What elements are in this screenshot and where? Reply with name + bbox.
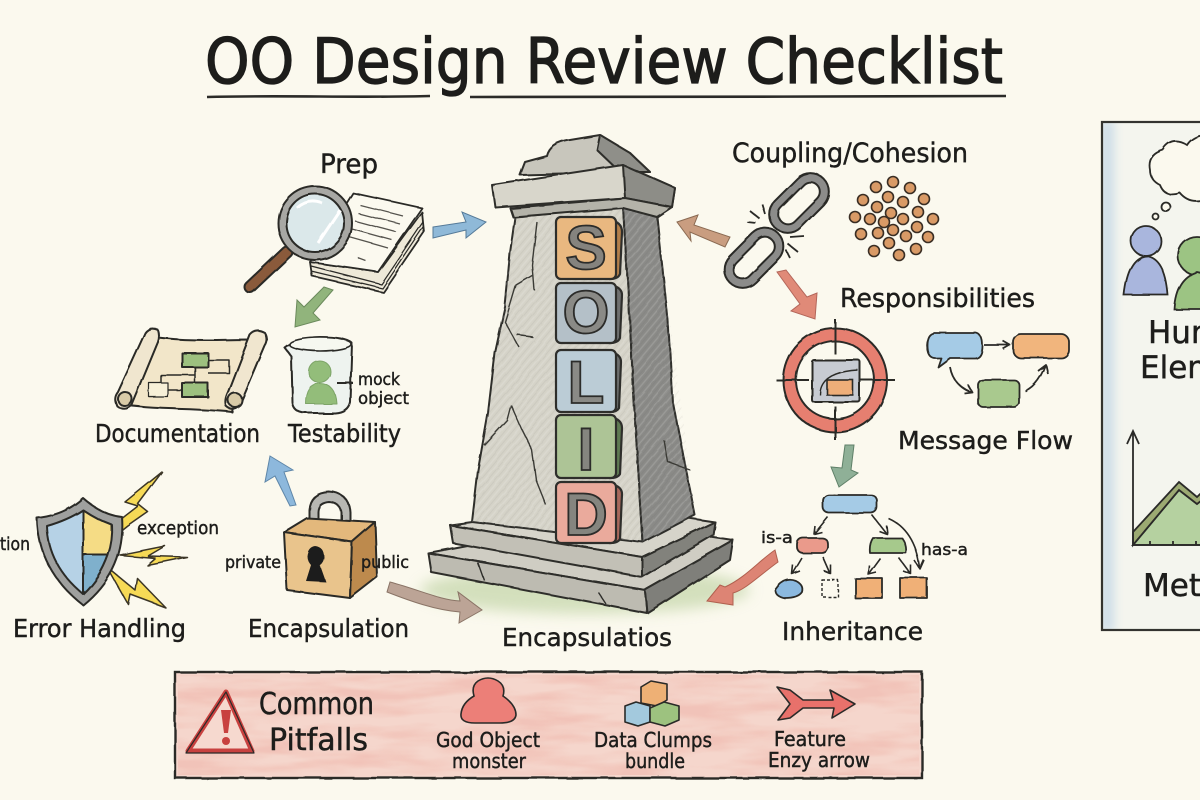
block L: L (568, 349, 604, 416)
error handling section (0, 472, 219, 643)
block I (556, 415, 622, 483)
label: Error Handling: Error Handling (13, 614, 186, 643)
label: public: public (361, 553, 409, 573)
label: Feature Enzy arrow: Enzy arrow (768, 748, 870, 772)
label: Encapsulatios under pillar: Encapsulatios (502, 623, 672, 652)
arrow: responsibilities to inheritance (831, 445, 858, 487)
chart: metrics (1127, 431, 1200, 545)
label: exception: exception (137, 518, 219, 539)
message flow section (898, 333, 1073, 455)
label: is-a: is-a (761, 528, 793, 547)
icon: cohesion dots (850, 176, 938, 260)
prep section (250, 149, 424, 292)
block S (556, 214, 622, 283)
label: Human Elements (clipped) (1140, 315, 1200, 386)
block L (556, 349, 621, 416)
icon: beaker with mock object (284, 337, 353, 413)
title: OO Design Review Checklist (205, 25, 1003, 98)
encapsulation section (225, 492, 409, 643)
label: Prep: Prep (320, 149, 378, 180)
block O: O (563, 279, 609, 346)
label: Coupling/Cohesion: Coupling/Cohesion (732, 138, 968, 169)
icon: broken chain (723, 172, 830, 289)
pitfall: Data Clumps bundle (594, 681, 712, 773)
SOLID blocks (556, 214, 622, 548)
stone pillar (428, 135, 733, 613)
arrow: coupling to responsibilities (777, 270, 817, 319)
label: Documentation: Documentation (95, 419, 260, 448)
arrow: encapsulation to foundation (387, 582, 482, 623)
label: God Object monster (436, 728, 540, 773)
label: God Object monster: God Object (436, 728, 540, 752)
icon: magnifying glass (250, 190, 348, 287)
icon: papers (310, 193, 424, 292)
monolith: SOLID pillar (420, 135, 750, 614)
label: mock object (358, 370, 409, 409)
label: Data Clumps bundle: Data Clumps (594, 728, 712, 752)
pillar faces (472, 207, 695, 542)
icon: thought cloud (1150, 134, 1200, 220)
arrow: encapsulation to testability (265, 456, 296, 506)
block D (556, 481, 622, 548)
grass (420, 566, 750, 614)
cracks (484, 222, 690, 505)
label: Encapsulation: Encapsulation (248, 614, 409, 643)
arrow: prep to pillar (433, 212, 486, 238)
heading: Common Pitfalls: Common (259, 687, 374, 722)
label: Feature Enzy arrow: Feature (774, 727, 846, 751)
icon: people (1124, 226, 1200, 309)
icon: lightning bolts (107, 472, 187, 607)
icon: padlock (284, 492, 377, 598)
icon: warning triangle (186, 692, 254, 753)
icon: cube bundle (625, 681, 679, 726)
icon: target with class window (776, 319, 895, 440)
icon: message flow diagram (927, 333, 1069, 407)
icon: class hierarchy (775, 495, 927, 598)
panel: common pitfalls (175, 672, 922, 778)
label: Testability: Testability (287, 419, 401, 448)
coupling/cohesion section (723, 138, 968, 289)
inheritance section (761, 495, 968, 646)
block D: D (564, 481, 608, 548)
label: Metrics (clipped): Met (1143, 568, 1200, 604)
label: mock object: mock (358, 370, 400, 390)
clipped label: exception at page edge: tion (0, 534, 30, 555)
arrow: prep to testability (295, 287, 333, 327)
documentation section (95, 329, 267, 448)
icon: monster blob (461, 678, 516, 723)
label: Responsibilities: Responsibilities (840, 284, 1035, 314)
base lower tier (428, 520, 733, 613)
testability section (284, 337, 409, 448)
arrow: inheritance to foundation (707, 550, 778, 605)
pitfall: Feature Envy arrow (768, 687, 870, 772)
cap rock (520, 135, 650, 175)
heading: Common Pitfalls: Pitfalls (269, 723, 368, 758)
label: Feature Enzy arrow (768, 727, 870, 772)
heading: Common Pitfalls (259, 687, 374, 758)
label: private: private (225, 553, 281, 573)
block S: S (565, 214, 607, 283)
panel: human elements and metrics (1100, 120, 1200, 632)
label: mock object: object (358, 389, 409, 409)
arrow: coupling to pillar (677, 215, 730, 247)
label: has-a: has-a (921, 540, 968, 559)
label: God Object monster: monster (452, 749, 527, 773)
pitfall: God Object monster (436, 678, 540, 773)
icon: scroll with diagram (115, 329, 267, 412)
icon: shield (37, 498, 122, 605)
icon: feature arrow (777, 687, 855, 720)
block I: I (578, 416, 594, 483)
label: Data Clumps bundle (594, 728, 712, 773)
cap slab (492, 165, 675, 207)
label: Message Flow: Message Flow (898, 426, 1073, 455)
label: Data Clumps bundle: bundle (625, 749, 685, 773)
base upper tier (450, 505, 715, 577)
responsibilities section (776, 284, 1035, 440)
label: Inheritance: Inheritance (782, 617, 923, 646)
